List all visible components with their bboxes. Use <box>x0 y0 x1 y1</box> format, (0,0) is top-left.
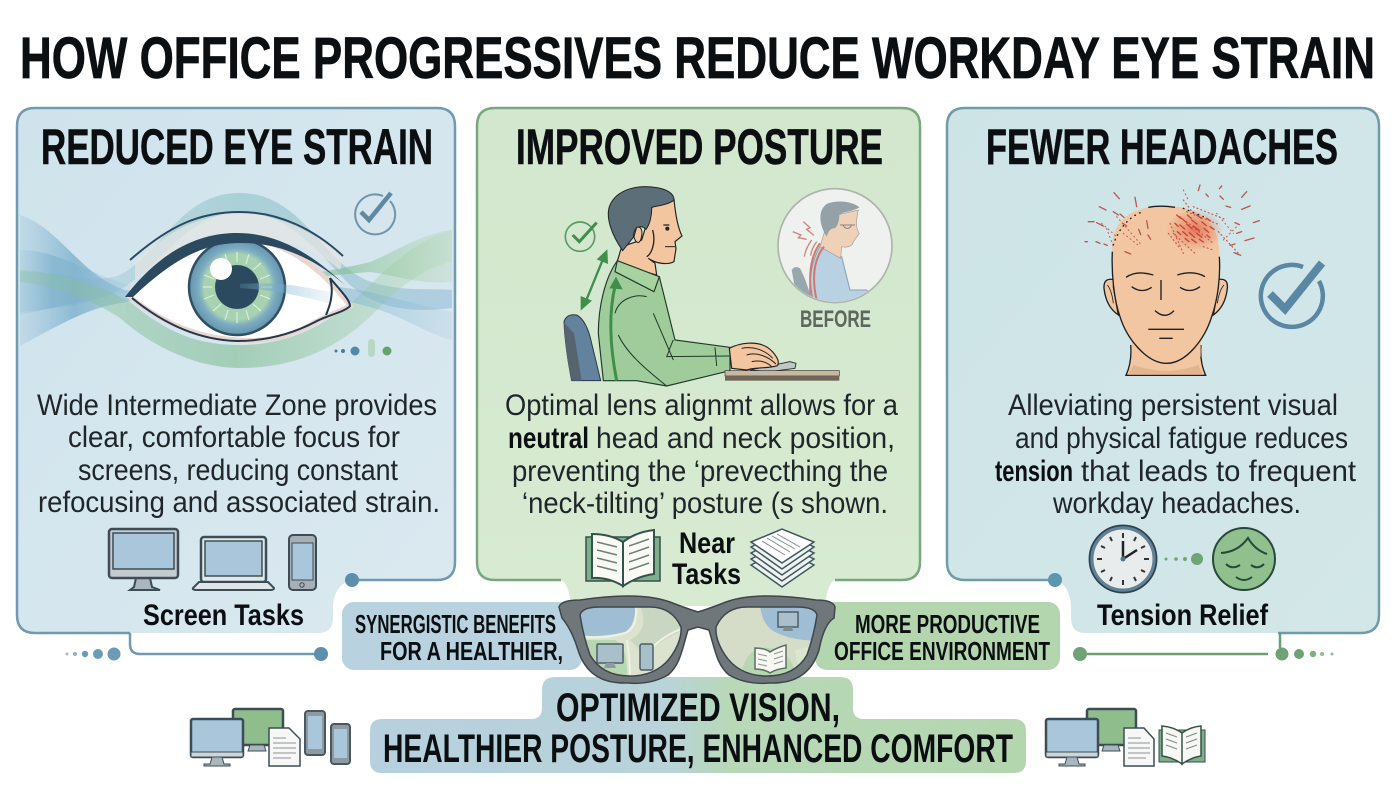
text: wide intermediate zone <box>37 389 440 519</box>
icon: desktop monitor <box>109 529 178 590</box>
banner: optimized vision: OPTIMIZED VISION, <box>556 686 840 730</box>
icon: relaxed face <box>1213 528 1275 590</box>
text: alleviating fatigue <box>995 389 1357 520</box>
text: optimal lens alignment: head and neck position, <box>596 422 895 455</box>
icon: paper stack <box>751 529 814 587</box>
band: more productive: MORE PRODUCTIVE <box>855 609 1040 639</box>
text: wide intermediate zone: refocusing and associated strain. <box>38 486 440 519</box>
text: optimal lens alignment: Optimal lens alignmt allows for a <box>505 389 898 422</box>
panel: fewer headaches <box>947 108 1379 633</box>
text: alleviating fatigue: that leads to frequent <box>1081 455 1357 488</box>
icon: phone <box>289 535 316 590</box>
icon: check mark <box>1261 263 1323 327</box>
icon: open book <box>586 530 660 586</box>
heading: improved posture: IMPROVED POSTURE <box>516 119 883 175</box>
text: alleviating fatigue: tension <box>995 455 1073 488</box>
label: screen tasks: Screen Tasks <box>143 599 304 632</box>
label: tension relief: Tension Relief <box>1097 599 1269 632</box>
text: wide intermediate zone: clear, comfortable focus for <box>68 421 400 454</box>
decorative dots: clock to face <box>1164 553 1203 565</box>
panel: reduced eye strain <box>17 108 455 633</box>
banner: optimized vision: HEALTHIER POSTURE, ENHANCED COMFORT <box>383 727 1013 771</box>
banner: optimized vision <box>370 677 1026 773</box>
text: alleviating fatigue: workday headaches. <box>1052 487 1301 520</box>
heading: reduced eye strain: REDUCED EYE STRAIN <box>41 119 433 175</box>
connector: right panel to band <box>1048 573 1334 661</box>
text: alleviating fatigue: and physical fatigue reduces <box>1015 422 1348 455</box>
label: near tasks <box>672 527 741 591</box>
illustration: head with headache <box>1085 185 1259 375</box>
icon: laptop <box>193 537 274 590</box>
text: alleviating fatigue: Alleviating persistent visual <box>1008 389 1338 422</box>
band: synergistic benefits <box>342 602 582 670</box>
label: near tasks: Near <box>679 527 735 560</box>
icon: check mark <box>355 193 395 234</box>
label: before: BEFORE <box>800 306 871 333</box>
text: optimal lens alignment: preventing the ‘prevecthing the <box>512 455 888 488</box>
text: optimal lens alignment: ‘neck-tilting’ posture (s shown. <box>522 487 888 520</box>
connector: left panel to band <box>66 573 359 661</box>
band: more productive: OFFICE ENVIRONMENT <box>834 636 1050 666</box>
text: wide intermediate zone: screens, reducing constant <box>78 454 399 487</box>
label: near tasks: Tasks <box>672 558 741 591</box>
panel: improved posture <box>477 108 920 606</box>
icon group: bottom right devices and book <box>1046 709 1205 766</box>
icon: eye with light waves <box>20 193 452 368</box>
icon: clock <box>1090 526 1156 592</box>
icon group: bottom left devices <box>191 709 350 766</box>
illustration: seated man with good posture <box>564 187 839 386</box>
band: synergistic benefits: SYNERGISTIC BENEFITS <box>355 609 556 639</box>
inset: before posture circle <box>778 189 892 307</box>
text: optimal lens alignment <box>505 389 898 520</box>
decorative dots: eye <box>334 339 392 357</box>
band: synergistic benefits: FOR A HEALTHIER, <box>380 636 563 666</box>
band: more productive <box>815 602 1060 670</box>
text: wide intermediate zone: Wide Intermediate Zone provides <box>37 389 437 422</box>
icon: progressive glasses <box>559 596 835 683</box>
text: optimal lens alignment: neutral <box>508 422 589 455</box>
